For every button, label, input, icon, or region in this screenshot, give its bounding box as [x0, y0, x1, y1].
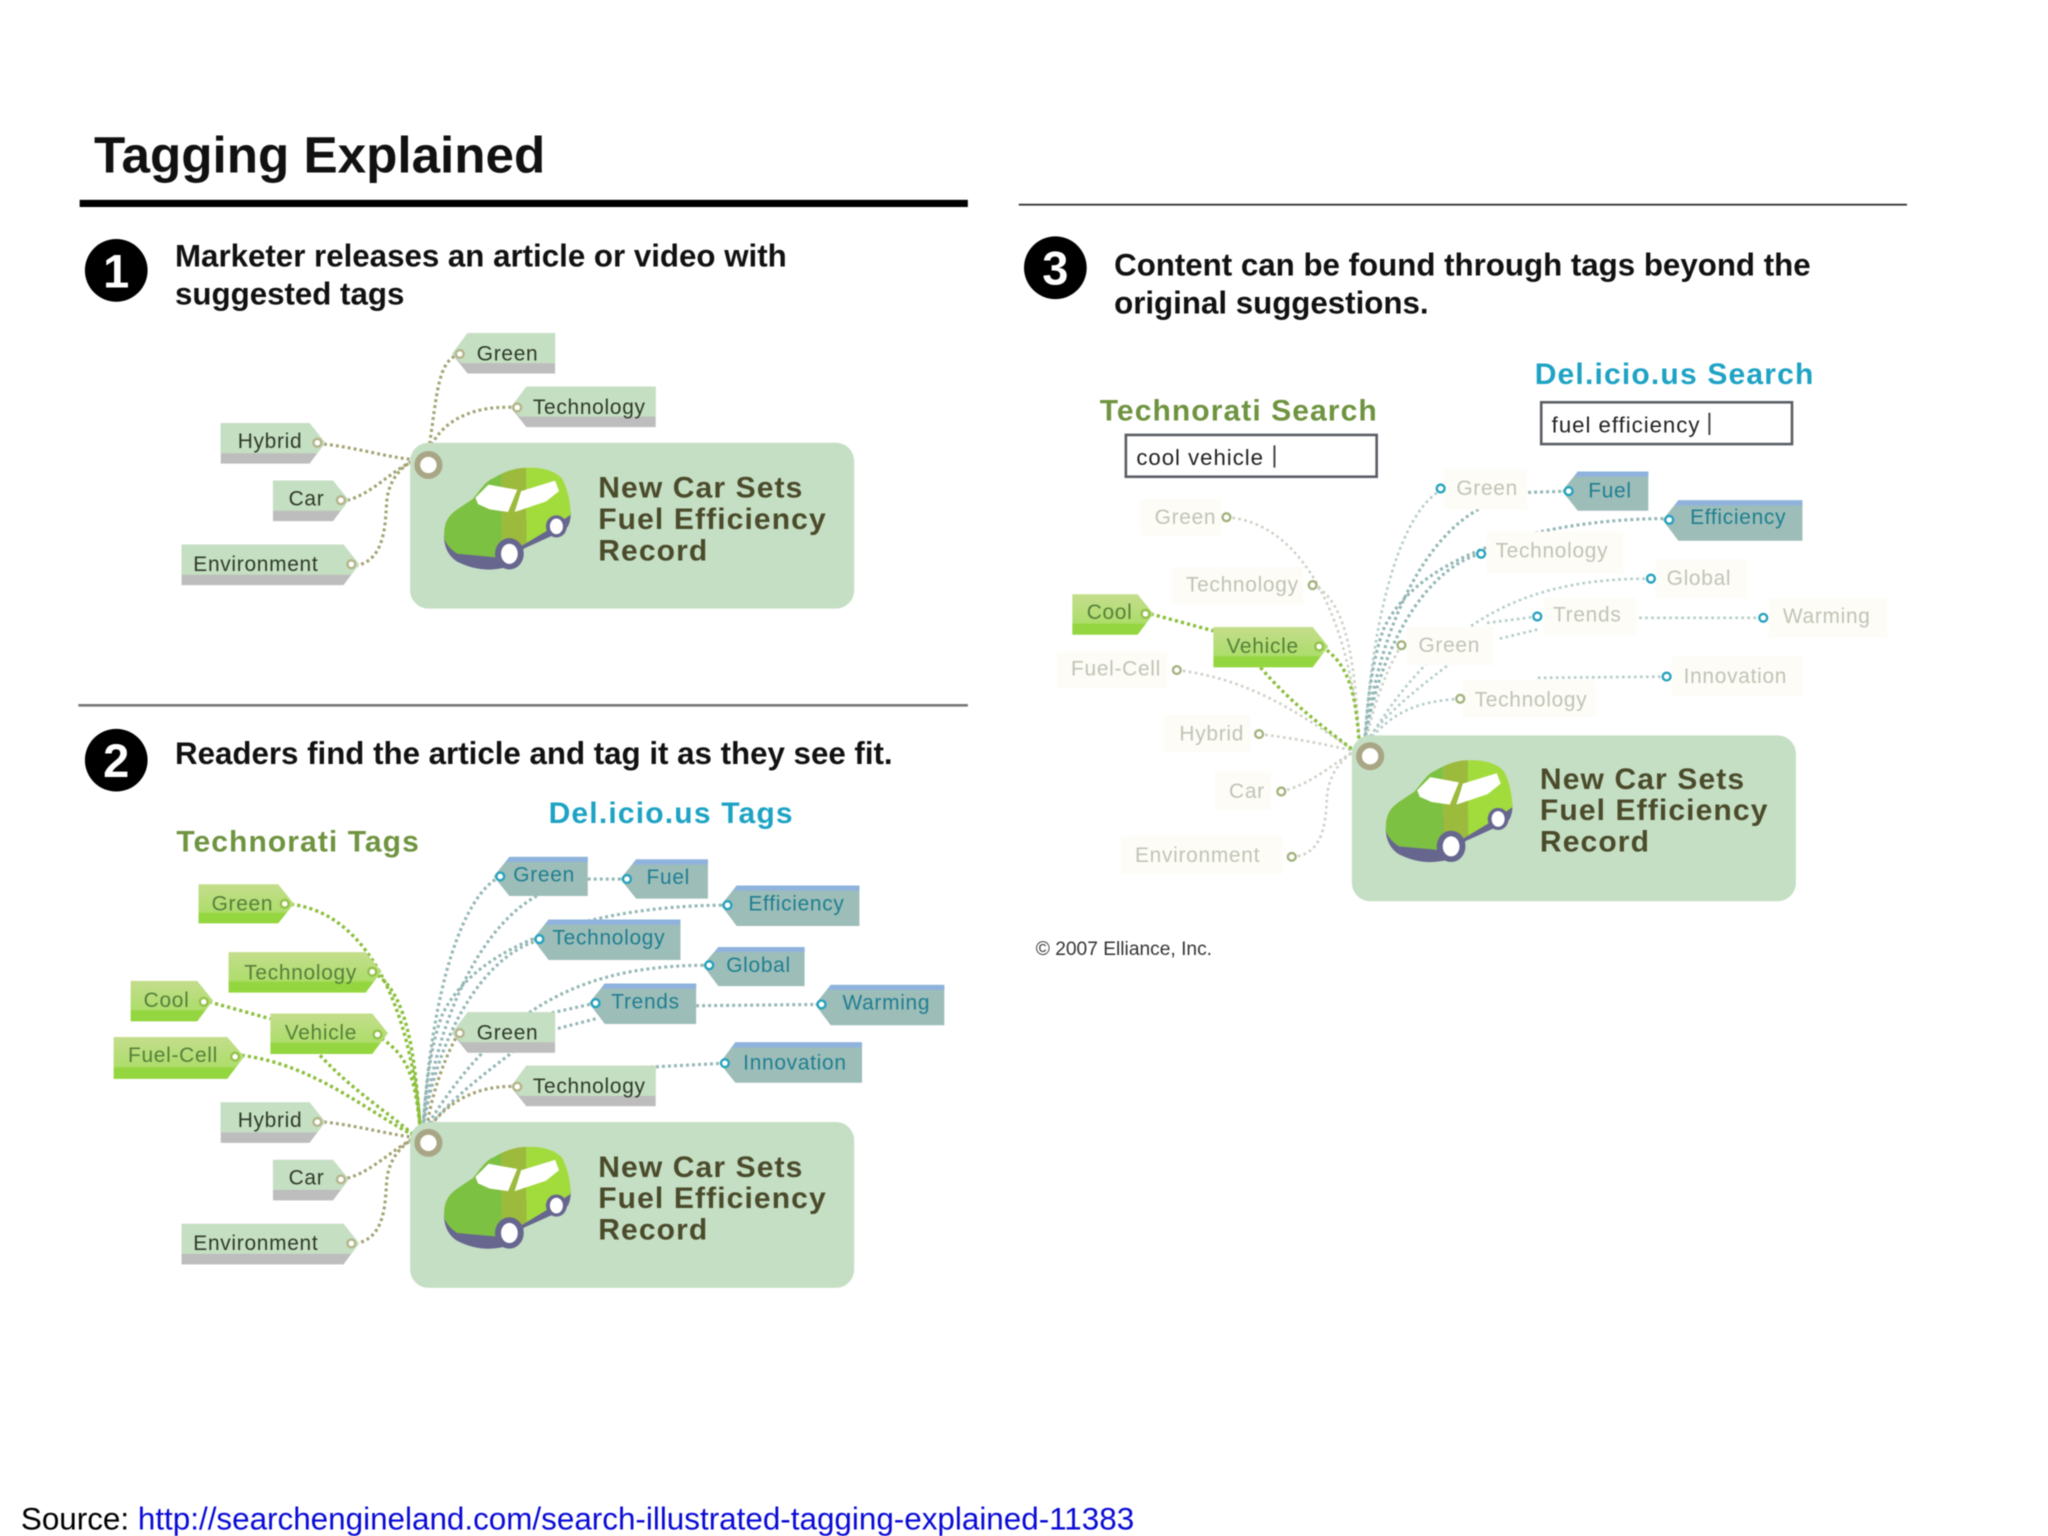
- tag: Green (Technorati): [199, 884, 294, 923]
- tag: Technology (faded, Del.icio.us): Technology: [1496, 540, 1608, 563]
- tag: Innovation: Innovation: [743, 1052, 847, 1075]
- tag: Green: Green: [477, 342, 538, 365]
- article card: New Car Sets: [1540, 763, 1745, 796]
- tag: Fuel-Cell (Technorati): [114, 1037, 244, 1079]
- tag: Vehicle (Technorati): [270, 1014, 388, 1054]
- tag: Hybrid (faded): Hybrid: [1179, 723, 1244, 746]
- tag: Green (suggested): [452, 1012, 555, 1053]
- tag: Cool (Technorati): Cool: [144, 989, 189, 1012]
- step 1 connectors: [324, 354, 517, 566]
- step 1 number badge: [85, 239, 148, 302]
- tag: Hybrid: Hybrid: [238, 430, 302, 453]
- tag: Innovation: [720, 1042, 862, 1083]
- tag: Hybrid: Hybrid: [238, 1109, 302, 1132]
- tag: Green (Del.icio.us): [494, 857, 588, 896]
- Technorati search box: [1126, 435, 1377, 477]
- step 2 number badge: 2: [103, 734, 129, 787]
- article card: [410, 443, 854, 609]
- hub ring: [1359, 745, 1381, 767]
- tag: Global: [703, 947, 805, 986]
- panel: step 1: [85, 238, 854, 609]
- tag: Green (faded, Del.icio.us): Green: [1456, 477, 1518, 500]
- tag: Trends: Trends: [611, 990, 680, 1013]
- tag: Environment: Environment: [193, 553, 318, 576]
- tag: Technology: Technology: [533, 396, 646, 419]
- Technorati Search heading: Technorati Search: [1100, 395, 1378, 428]
- article card: Fuel Efficiency: [1540, 794, 1769, 827]
- tag: Efficiency: [721, 886, 859, 926]
- tag: Car (faded): [1229, 780, 1285, 803]
- tag: Warming (faded): Warming: [1783, 605, 1871, 628]
- tag: Technology (suggested): [511, 1066, 656, 1106]
- tag: Car: Car: [289, 487, 324, 510]
- tag: Efficiency (highlighted): Efficiency: [1690, 506, 1786, 529]
- tag: Global: Global: [726, 954, 791, 977]
- tag: Technology (Del.icio.us): [533, 920, 680, 960]
- article card: Record: [1540, 826, 1650, 859]
- article card: Fuel Efficiency: [598, 1182, 827, 1215]
- step 3 number badge: [1024, 236, 1087, 299]
- tag: Technology (faded, suggested): Technology: [1475, 689, 1587, 712]
- tag: Efficiency (highlighted): [1663, 500, 1802, 541]
- step 2 heading: Readers find the article and tag it as they see fit.: [175, 736, 893, 771]
- tag: Vehicle (highlighted): Vehicle: [1226, 635, 1299, 658]
- step 3 heading: Content can be found through tags beyond the: [1114, 248, 1811, 283]
- tag: Trends: [589, 984, 696, 1024]
- tag: Fuel: Fuel: [647, 866, 690, 889]
- Technorati Tags heading: Technorati Tags: [176, 826, 420, 859]
- step 1 number badge: 1: [103, 244, 129, 297]
- tag: Green (Del.icio.us): Green: [513, 864, 575, 887]
- tag: Vehicle (Technorati): Vehicle: [285, 1022, 357, 1045]
- tag: Fuel-Cell (Technorati): Fuel-Cell: [128, 1044, 218, 1067]
- Del.icio.us Search heading: Del.icio.us Search: [1535, 358, 1815, 391]
- article card: [1352, 735, 1796, 901]
- tag: Fuel (highlighted): Fuel: [1588, 480, 1632, 503]
- tag: Global (faded): Global: [1667, 567, 1731, 590]
- tag: Fuel: [620, 859, 708, 899]
- tag: Fuel-Cell (faded): Fuel-Cell: [1071, 657, 1161, 680]
- tag: Green: [452, 333, 555, 374]
- step 1 heading: Marketer releases an article or video with: [175, 238, 787, 273]
- tag: Green (faded, suggested): Green: [1418, 634, 1480, 657]
- tag: Cool (Technorati): [131, 981, 213, 1021]
- tag: Environment: [182, 545, 359, 585]
- Del.icio.us search box: fuel efficiency: [1552, 412, 1700, 437]
- tag: Technology (Del.icio.us): Technology: [552, 926, 665, 949]
- tag: Green (faded): Green: [1155, 506, 1216, 529]
- tag: Technology (Technorati): Technology: [244, 962, 357, 985]
- tag: Efficiency: Efficiency: [748, 892, 845, 915]
- article card: New Car Sets: [598, 1151, 803, 1184]
- title: Tagging Explained: [94, 126, 545, 183]
- tag: Warming: Warming: [842, 992, 930, 1015]
- hub ring: [417, 454, 440, 476]
- tag: Technology (Technorati): [229, 952, 381, 993]
- step 1 heading: suggested tags: [175, 276, 404, 311]
- article card: Record: [598, 534, 708, 567]
- Del.icio.us Tags heading: Del.icio.us Tags: [549, 797, 794, 830]
- tag: Hybrid: [221, 423, 325, 464]
- tag: Environment (faded): Environment: [1135, 844, 1260, 867]
- tag: Vehicle (highlighted): [1213, 627, 1328, 667]
- step 2 number badge: [85, 729, 148, 792]
- step 3 heading: original suggestions.: [1114, 285, 1429, 320]
- tag: Environment: Environment: [193, 1232, 318, 1255]
- article card: [410, 1122, 854, 1288]
- tag: Technology (suggested): Technology: [533, 1075, 646, 1098]
- step 2 connectors: [209, 876, 822, 1243]
- step 3 connectors: [1151, 490, 1763, 857]
- tag: Environment: [182, 1224, 359, 1264]
- tag: Car: [273, 481, 349, 521]
- tag: Green (suggested): Green: [477, 1022, 538, 1045]
- tag: Cool (highlighted): Cool: [1087, 601, 1133, 624]
- tag: Technology (faded): Technology: [1186, 574, 1299, 597]
- tag: Car: [273, 1160, 349, 1200]
- faded tag backgrounds: [1057, 469, 1887, 874]
- copyright: © 2007 Elliance, Inc.: [1036, 939, 1212, 960]
- panel: step 2: [85, 729, 944, 1288]
- article card: New Car Sets: [598, 472, 803, 505]
- tag: Car (faded): Car: [1229, 780, 1265, 803]
- step 3 number badge: 3: [1042, 242, 1068, 295]
- tag: Fuel (highlighted): [1562, 472, 1648, 511]
- tag: Trends (faded): Trends: [1553, 604, 1621, 627]
- panel: step 3: [1024, 236, 1887, 901]
- Technorati search box: cool vehicle: [1136, 445, 1264, 470]
- source line: Source: http://searchengineland.com/search-illustrated-tagging-explained-11383: [21, 1501, 1134, 1536]
- tag: Cool (highlighted): [1072, 594, 1153, 635]
- tag: Warming: [815, 985, 944, 1025]
- tag: Hybrid: [221, 1102, 325, 1143]
- tag: Car: Car: [289, 1167, 324, 1190]
- Del.icio.us search box: [1541, 402, 1792, 444]
- tag: Innovation (faded): Innovation: [1684, 665, 1787, 688]
- article card: Fuel Efficiency: [598, 503, 827, 536]
- tag: Technology: [511, 387, 656, 427]
- tag: Green (Technorati): Green: [212, 892, 273, 915]
- article card: Record: [598, 1214, 708, 1247]
- hub ring: [417, 1132, 440, 1154]
- title rule: [80, 200, 968, 207]
